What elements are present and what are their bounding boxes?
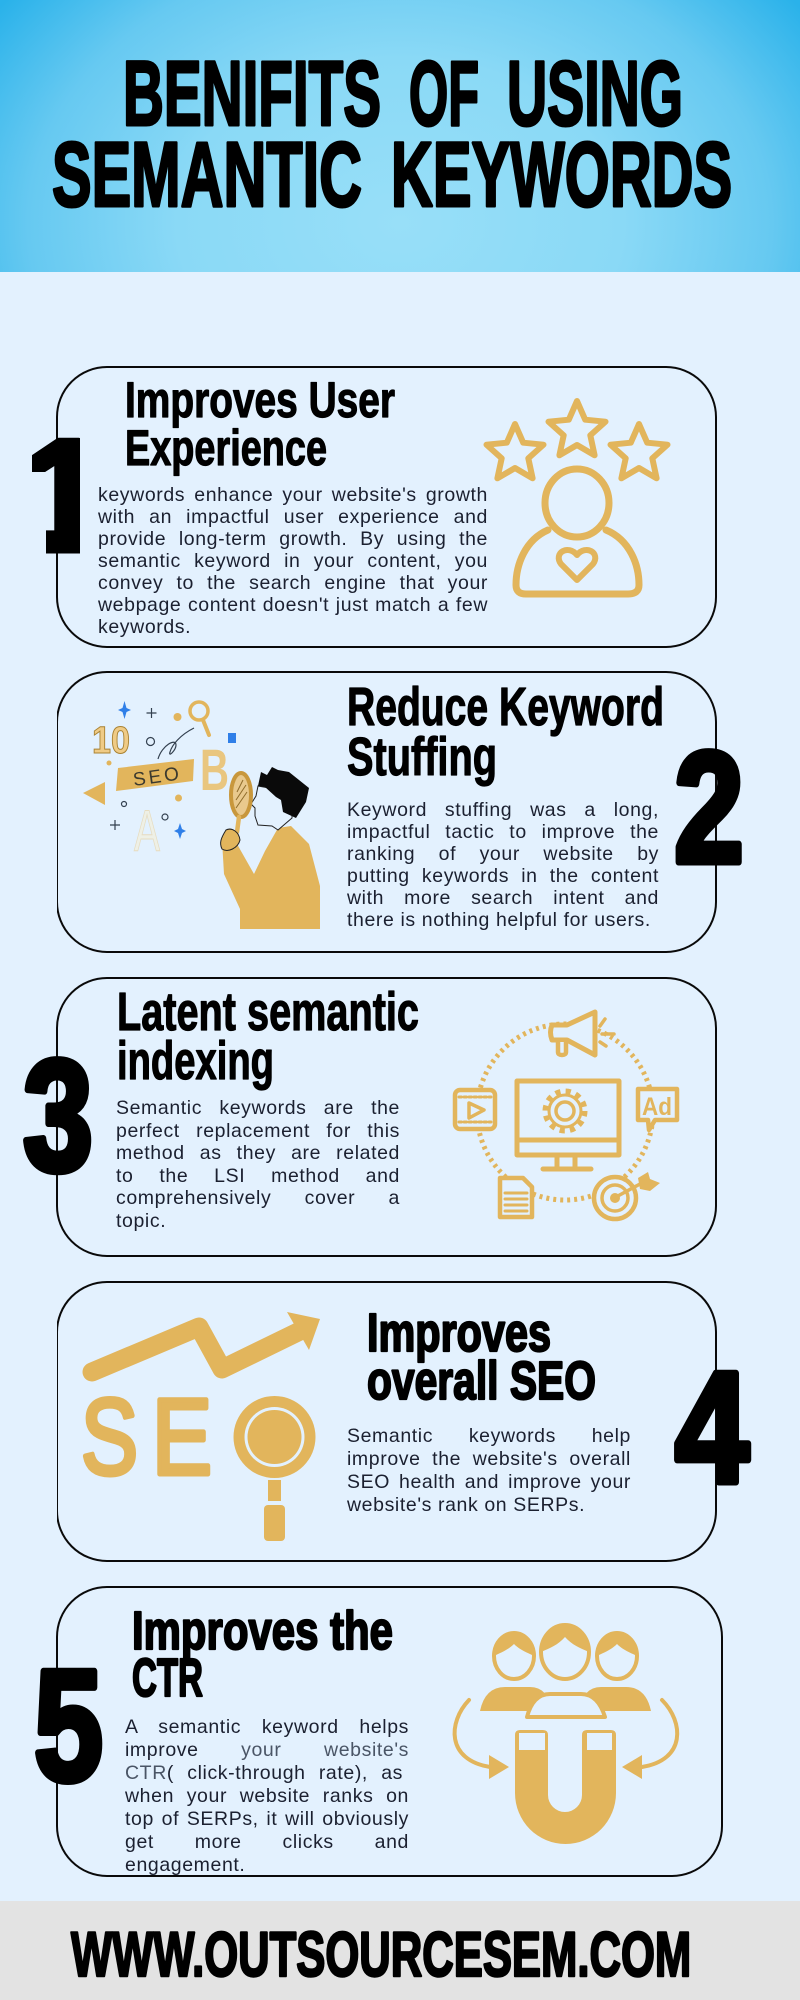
- heading: [132, 1601, 393, 1708]
- header banner: [0, 0, 800, 272]
- body text: CTR( click-through rate), as: [125, 1762, 403, 1784]
- body text: keywords enhance your website's growth: [98, 484, 488, 506]
- illustration: person with magnifier and SEO doodles: [83, 701, 320, 929]
- icon: SEO magnifier with rising arrow: S: [81, 1376, 138, 1497]
- illustration: person with magnifier and SEO doodles: 10: [92, 720, 130, 762]
- card outline: [57, 1587, 722, 1876]
- illustration: person with magnifier and SEO doodles: SEO: [132, 763, 183, 791]
- heading: CTR: [132, 1648, 203, 1708]
- card outline: [57, 1282, 716, 1561]
- body text: improve the website's overall: [347, 1448, 631, 1470]
- heading: [367, 1303, 596, 1411]
- title: USING: [507, 43, 683, 145]
- body text: convey to the search engine that your: [98, 572, 488, 594]
- heading: [347, 677, 664, 787]
- number 5: 5: [34, 1638, 103, 1814]
- body text: [347, 799, 659, 931]
- icon: digital marketing ring: Ad: [642, 1093, 672, 1121]
- website url: WWW.OUTSOURCESEM.COM: [71, 1919, 691, 1990]
- body text: method as they are related: [116, 1142, 400, 1164]
- heading: [125, 372, 395, 476]
- body text: impactful tactic to improve the: [347, 821, 659, 843]
- body text: ranking of your website by: [347, 843, 659, 865]
- title: OF: [409, 43, 479, 145]
- body text: provide long-term growth. By using the: [98, 528, 488, 550]
- body text: keywords.: [98, 616, 191, 638]
- body text: get more clicks and: [125, 1831, 409, 1853]
- body text: webpage content doesn't just match a few: [98, 594, 488, 616]
- heading: overall SEO: [367, 1351, 596, 1411]
- icon: user with stars: [486, 401, 668, 594]
- body text: to the LSI method and: [116, 1165, 400, 1187]
- number 3: 3: [23, 1028, 93, 1204]
- heading: Experience: [125, 420, 327, 476]
- heading: Improves: [367, 1303, 551, 1363]
- body text: top of SERPs, it will obviously: [125, 1808, 409, 1830]
- footer band: [0, 1901, 800, 2000]
- body text: website's rank on SERPs.: [347, 1494, 585, 1516]
- body text: perfect replacement for this: [116, 1120, 400, 1142]
- icon: SEO magnifier with rising arrow: [81, 1312, 320, 1541]
- body text: [125, 1716, 409, 1876]
- body text: SEO health and improve your: [347, 1471, 631, 1493]
- body text: Semantic keywords are the: [116, 1097, 400, 1119]
- body text: improve your website's: [125, 1739, 409, 1761]
- body text: Semantic keywords help: [347, 1425, 631, 1447]
- icon: customers and magnet: [455, 1624, 677, 1844]
- card outline: [57, 672, 716, 952]
- body text: [116, 1097, 400, 1232]
- body text: putting keywords in the content: [347, 865, 659, 887]
- body text: topic.: [116, 1210, 166, 1232]
- heading: indexing: [117, 1031, 274, 1091]
- title: [52, 43, 732, 226]
- title: SEMANTIC: [52, 124, 362, 226]
- body text: semantic keyword in your content, you: [98, 550, 488, 572]
- panel: latent semantic indexing: [23, 977, 717, 1257]
- illustration: person with magnifier and SEO doodles: A: [134, 799, 160, 864]
- heading: [117, 982, 419, 1091]
- body text: [347, 1425, 631, 1516]
- icon: SEO magnifier with rising arrow: E: [152, 1376, 212, 1497]
- body text: when your website ranks on: [125, 1785, 409, 1807]
- body text: with more search intent and: [347, 887, 659, 909]
- icon: digital marketing ring: [455, 1012, 677, 1219]
- heading: Stuffing: [347, 727, 497, 787]
- panel: reduce keyword stuffing: [57, 671, 744, 953]
- body text: there is nothing helpful for users.: [347, 909, 651, 931]
- heading: Latent semantic: [117, 982, 419, 1042]
- card outline: [57, 978, 716, 1256]
- card outline: [57, 367, 716, 647]
- title: BENIFITS: [123, 43, 381, 145]
- body text: with an impactful user experience and: [98, 506, 488, 528]
- body text: engagement.: [125, 1854, 245, 1876]
- panel: improves the ctr: [34, 1586, 723, 1877]
- illustration: person with magnifier and SEO doodles: B: [200, 738, 229, 803]
- heading: Improves User: [125, 372, 395, 428]
- panel: improves user experience: [32, 366, 717, 648]
- title: KEYWORDS: [391, 124, 732, 226]
- body text: [98, 484, 488, 638]
- panel: improves overall seo: [57, 1281, 752, 1562]
- body text: Keyword stuffing was a long,: [347, 799, 659, 821]
- body text: comprehensively cover a: [116, 1187, 400, 1209]
- heading: Improves the: [132, 1601, 393, 1661]
- body text: A semantic keyword helps: [125, 1716, 409, 1738]
